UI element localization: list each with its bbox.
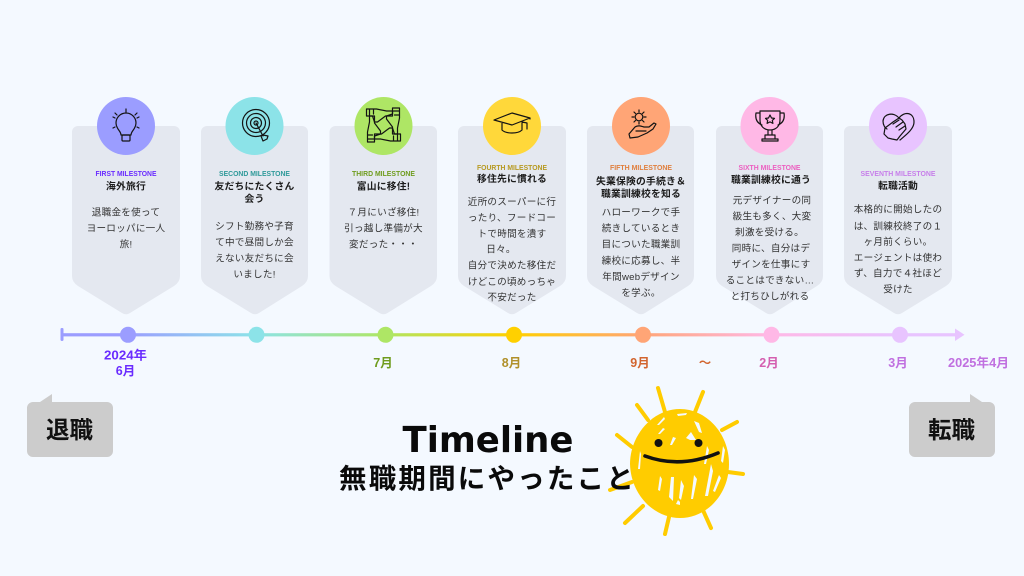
panel: fourth milestone: 日々。 <box>486 244 516 256</box>
panel: third milestone: ７月にいざ移住! <box>348 206 419 218</box>
panel: sixth milestone: 刺激を受ける。 <box>735 226 804 238</box>
date labels: 2月 <box>759 356 779 370</box>
panel: third milestone: 引っ越し準備が大 <box>344 222 423 234</box>
panel: first milestone <box>72 97 180 314</box>
panel: sixth milestone <box>716 97 823 314</box>
panel: seventh milestone: は、訓練校終了の１ <box>854 220 942 232</box>
panel: seventh milestone: 転職活動 <box>878 179 918 192</box>
callout: 転職 <box>909 394 995 457</box>
panel: second milestone: いました! <box>233 270 276 280</box>
panel: second milestone: 友だちにたくさん <box>215 180 294 192</box>
panel: first milestone: 旅! <box>120 238 132 250</box>
panel: sixth milestone: ることはできない… <box>726 276 814 286</box>
panel: third milestone: 変だった・・・ <box>349 238 418 250</box>
panel: fifth milestone <box>587 97 694 314</box>
panel: fifth milestone: 目についた職業訓 <box>602 238 680 250</box>
panel: fourth milestone <box>458 97 566 314</box>
panel: first milestone: FIRST MILESTONE <box>96 169 157 178</box>
panel: sixth milestone: ザインを仕事にす <box>732 258 810 270</box>
date labels: 9月 <box>630 356 650 370</box>
panel: fourth milestone: 移住先に慣れる <box>477 172 547 185</box>
panel: sixth milestone: 同時に、自分はデ <box>732 242 810 254</box>
panel: sixth milestone: SIXTH MILESTONE <box>738 163 801 172</box>
panel: seventh milestone <box>844 97 952 314</box>
panel: sixth milestone: と打ちひしがれる <box>731 290 809 302</box>
timeline axis <box>60 327 964 343</box>
date labels: 〜 <box>699 356 712 370</box>
panel: fifth milestone: 失業保険の手続き＆ <box>596 174 686 188</box>
panel: seventh milestone: SEVENTH MILESTONE <box>860 169 936 178</box>
panel: first milestone: 海外旅行 <box>106 180 146 192</box>
title: Timeline <box>402 420 574 461</box>
panel: fifth milestone: 続きしているとき <box>602 222 680 234</box>
panel: third milestone: 富山に移住! <box>357 180 410 192</box>
icon: target <box>242 110 270 141</box>
panel: fifth milestone: FIFTH MILESTONE <box>610 163 672 172</box>
date labels: 2024年 <box>104 348 147 362</box>
panel: fourth milestone: 自分で決めた移住だ <box>468 260 556 272</box>
panel: second milestone: シフト勤務や子育 <box>215 220 294 232</box>
panel: seventh milestone: 本格的に開始したの <box>854 204 942 216</box>
panel: fifth milestone: 年間webデザイン <box>602 271 680 283</box>
panel: fourth milestone: 不安だった <box>487 292 537 304</box>
panel: seventh milestone: 受けた <box>883 284 913 296</box>
icon: graduation cap <box>494 113 530 133</box>
date labels: 2025年4月 <box>948 355 1009 370</box>
date labels: 8月 <box>502 356 521 370</box>
panel: fourth milestone: トで時間を潰す <box>478 228 546 240</box>
panel: first milestone: 退職金を使って <box>92 206 160 218</box>
panel: fourth milestone: ったり、フードコー <box>468 213 556 224</box>
panel: fifth milestone: を学ぶ。 <box>621 287 661 299</box>
panel: second milestone <box>201 97 308 314</box>
panel: fifth milestone: 職業訓練校を知る <box>601 187 681 200</box>
icon: light bulb <box>113 109 139 141</box>
panel: sixth milestone: 元デザイナーの同 <box>733 194 811 206</box>
panel: third milestone <box>330 97 437 314</box>
icon: linked hands <box>366 108 400 142</box>
panel: second milestone: 会う <box>244 192 264 205</box>
panel: sixth milestone: 級生も多く、大変 <box>733 210 812 222</box>
panel: fourth milestone: けどこの頃めっちゃ <box>468 277 556 288</box>
date labels <box>104 348 1009 378</box>
panel: fifth milestone: 練校に応募し、半 <box>602 255 681 267</box>
icon: trophy <box>756 111 784 141</box>
icon: hand on heart <box>883 113 914 140</box>
panel: second milestone: えない友だちに会 <box>215 252 294 264</box>
date labels: 7月 <box>373 356 393 370</box>
panel: fourth milestone: 近所のスーパーに行 <box>468 196 556 208</box>
callout: 転職: 転職 <box>928 417 976 443</box>
title <box>339 420 636 494</box>
panel: sixth milestone: 職業訓練校に通う <box>731 173 811 186</box>
icon: scribbled sun <box>610 388 743 534</box>
panel: seventh milestone: ヶ月前くらい。 <box>864 236 932 248</box>
panel: second milestone: て中で昼間しか会 <box>215 236 294 248</box>
icon: hand holding sun <box>629 110 656 138</box>
callout: 退職 <box>27 394 113 457</box>
panel: first milestone: ヨーロッパに一人 <box>87 224 166 234</box>
date labels: 6月 <box>116 364 135 378</box>
callout: 退職: 退職 <box>46 417 93 443</box>
panel: second milestone: SECOND MILESTONE <box>219 169 290 178</box>
panel: fourth milestone: FOURTH MILESTONE <box>477 163 547 172</box>
panel: seventh milestone: エージェントは使わ <box>854 252 942 264</box>
subtitle: 無職期間にやったこと <box>339 463 636 494</box>
panel: fifth milestone: ハローワークで手 <box>602 206 681 218</box>
panel: seventh milestone: ず、自力で４社ほど <box>854 268 942 280</box>
panel: third milestone: THIRD MILESTONE <box>352 169 415 178</box>
date labels: 3月 <box>888 356 908 370</box>
